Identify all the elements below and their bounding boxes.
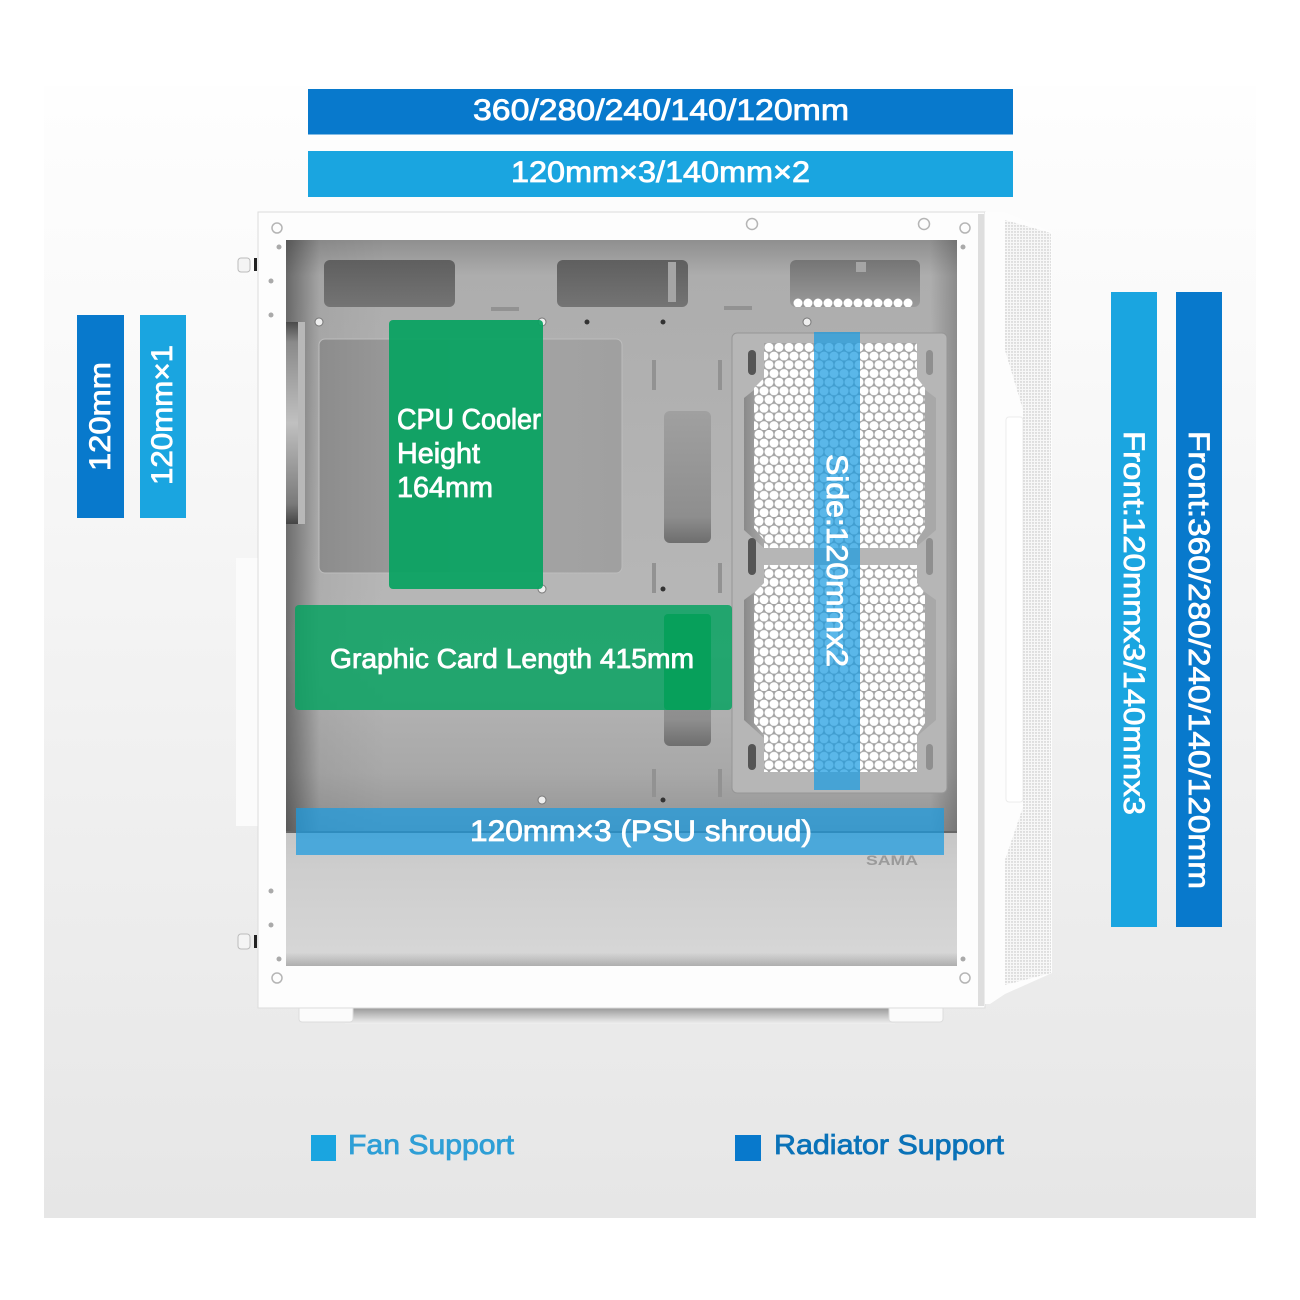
mount slots right <box>926 350 933 770</box>
CPU cooler height overlay <box>389 320 543 589</box>
PC case <box>236 212 1052 1024</box>
cable slots <box>664 411 711 746</box>
PSU shroud fan overlay <box>296 808 944 855</box>
standoff screws <box>315 318 811 804</box>
side fan overlay <box>814 332 860 790</box>
interior lower PSU shroud <box>286 832 957 966</box>
top bar: radiator support <box>308 89 1013 134</box>
rear fan bracket <box>286 322 305 524</box>
frame screws <box>272 218 970 983</box>
graphics card length overlay <box>295 605 732 710</box>
graphics card length overlay: Graphic Card Length 415mm <box>330 643 694 674</box>
left bar: radiator support <box>77 315 124 518</box>
interior upper motherboard tray <box>286 240 957 832</box>
frame rivets <box>268 244 966 962</box>
right bar: fan support: Front:120mmx3/140mmx3 <box>1117 431 1150 815</box>
top bar: radiator support: 360/280/240/140/120mm <box>473 94 849 127</box>
interior side shading <box>286 240 957 832</box>
CPU cooler height overlay: 164mm <box>397 472 493 504</box>
CPU cooler height overlay: CPU Cooler <box>397 404 541 436</box>
frame edge <box>978 214 984 1006</box>
PSU shroud fan overlay: 120mm×3 (PSU shroud) <box>470 815 812 848</box>
right bar: radiator support <box>1176 292 1222 927</box>
legend: radiator support: Radiator Support <box>774 1129 1004 1160</box>
top cutouts <box>324 260 920 308</box>
front light bar <box>1006 417 1023 802</box>
case floor shadow <box>345 1008 895 1024</box>
right bar: radiator support: Front:360/280/240/140/120mm <box>1182 431 1215 889</box>
front mesh <box>1005 220 1051 985</box>
nub clips <box>254 258 257 948</box>
left bar: fan support <box>140 315 186 518</box>
shroud top line <box>286 831 957 833</box>
legend: fan support: Fan Support <box>348 1129 514 1160</box>
small vertical slits <box>491 306 752 797</box>
left bar: radiator support: 120mm <box>84 362 117 471</box>
CPU cutout window <box>319 339 622 573</box>
front panel <box>985 212 1052 1004</box>
dark screw holes <box>584 320 666 802</box>
case frame <box>258 212 985 1008</box>
side fan mount plate <box>732 333 947 793</box>
left side handle strip <box>236 558 258 826</box>
top bar: fan support: 120mm×3/140mm×2 <box>511 156 810 189</box>
side fan overlay: Side:120mmx2 <box>820 454 853 667</box>
left bar: fan support: 120mm×1 <box>146 345 179 485</box>
fan recess shading <box>744 382 936 738</box>
case feet <box>299 1000 943 1022</box>
mesh upper fan <box>754 343 925 548</box>
right bar: fan support <box>1111 292 1157 927</box>
side rubber nubs <box>238 258 971 949</box>
CPU cooler height overlay: Height <box>397 438 480 470</box>
mount slots <box>748 350 756 770</box>
top bar: fan support <box>308 151 1013 197</box>
slot seen through overlay <box>664 614 711 710</box>
mesh lower fan <box>754 565 925 772</box>
brand mark: SAMA <box>866 852 918 868</box>
